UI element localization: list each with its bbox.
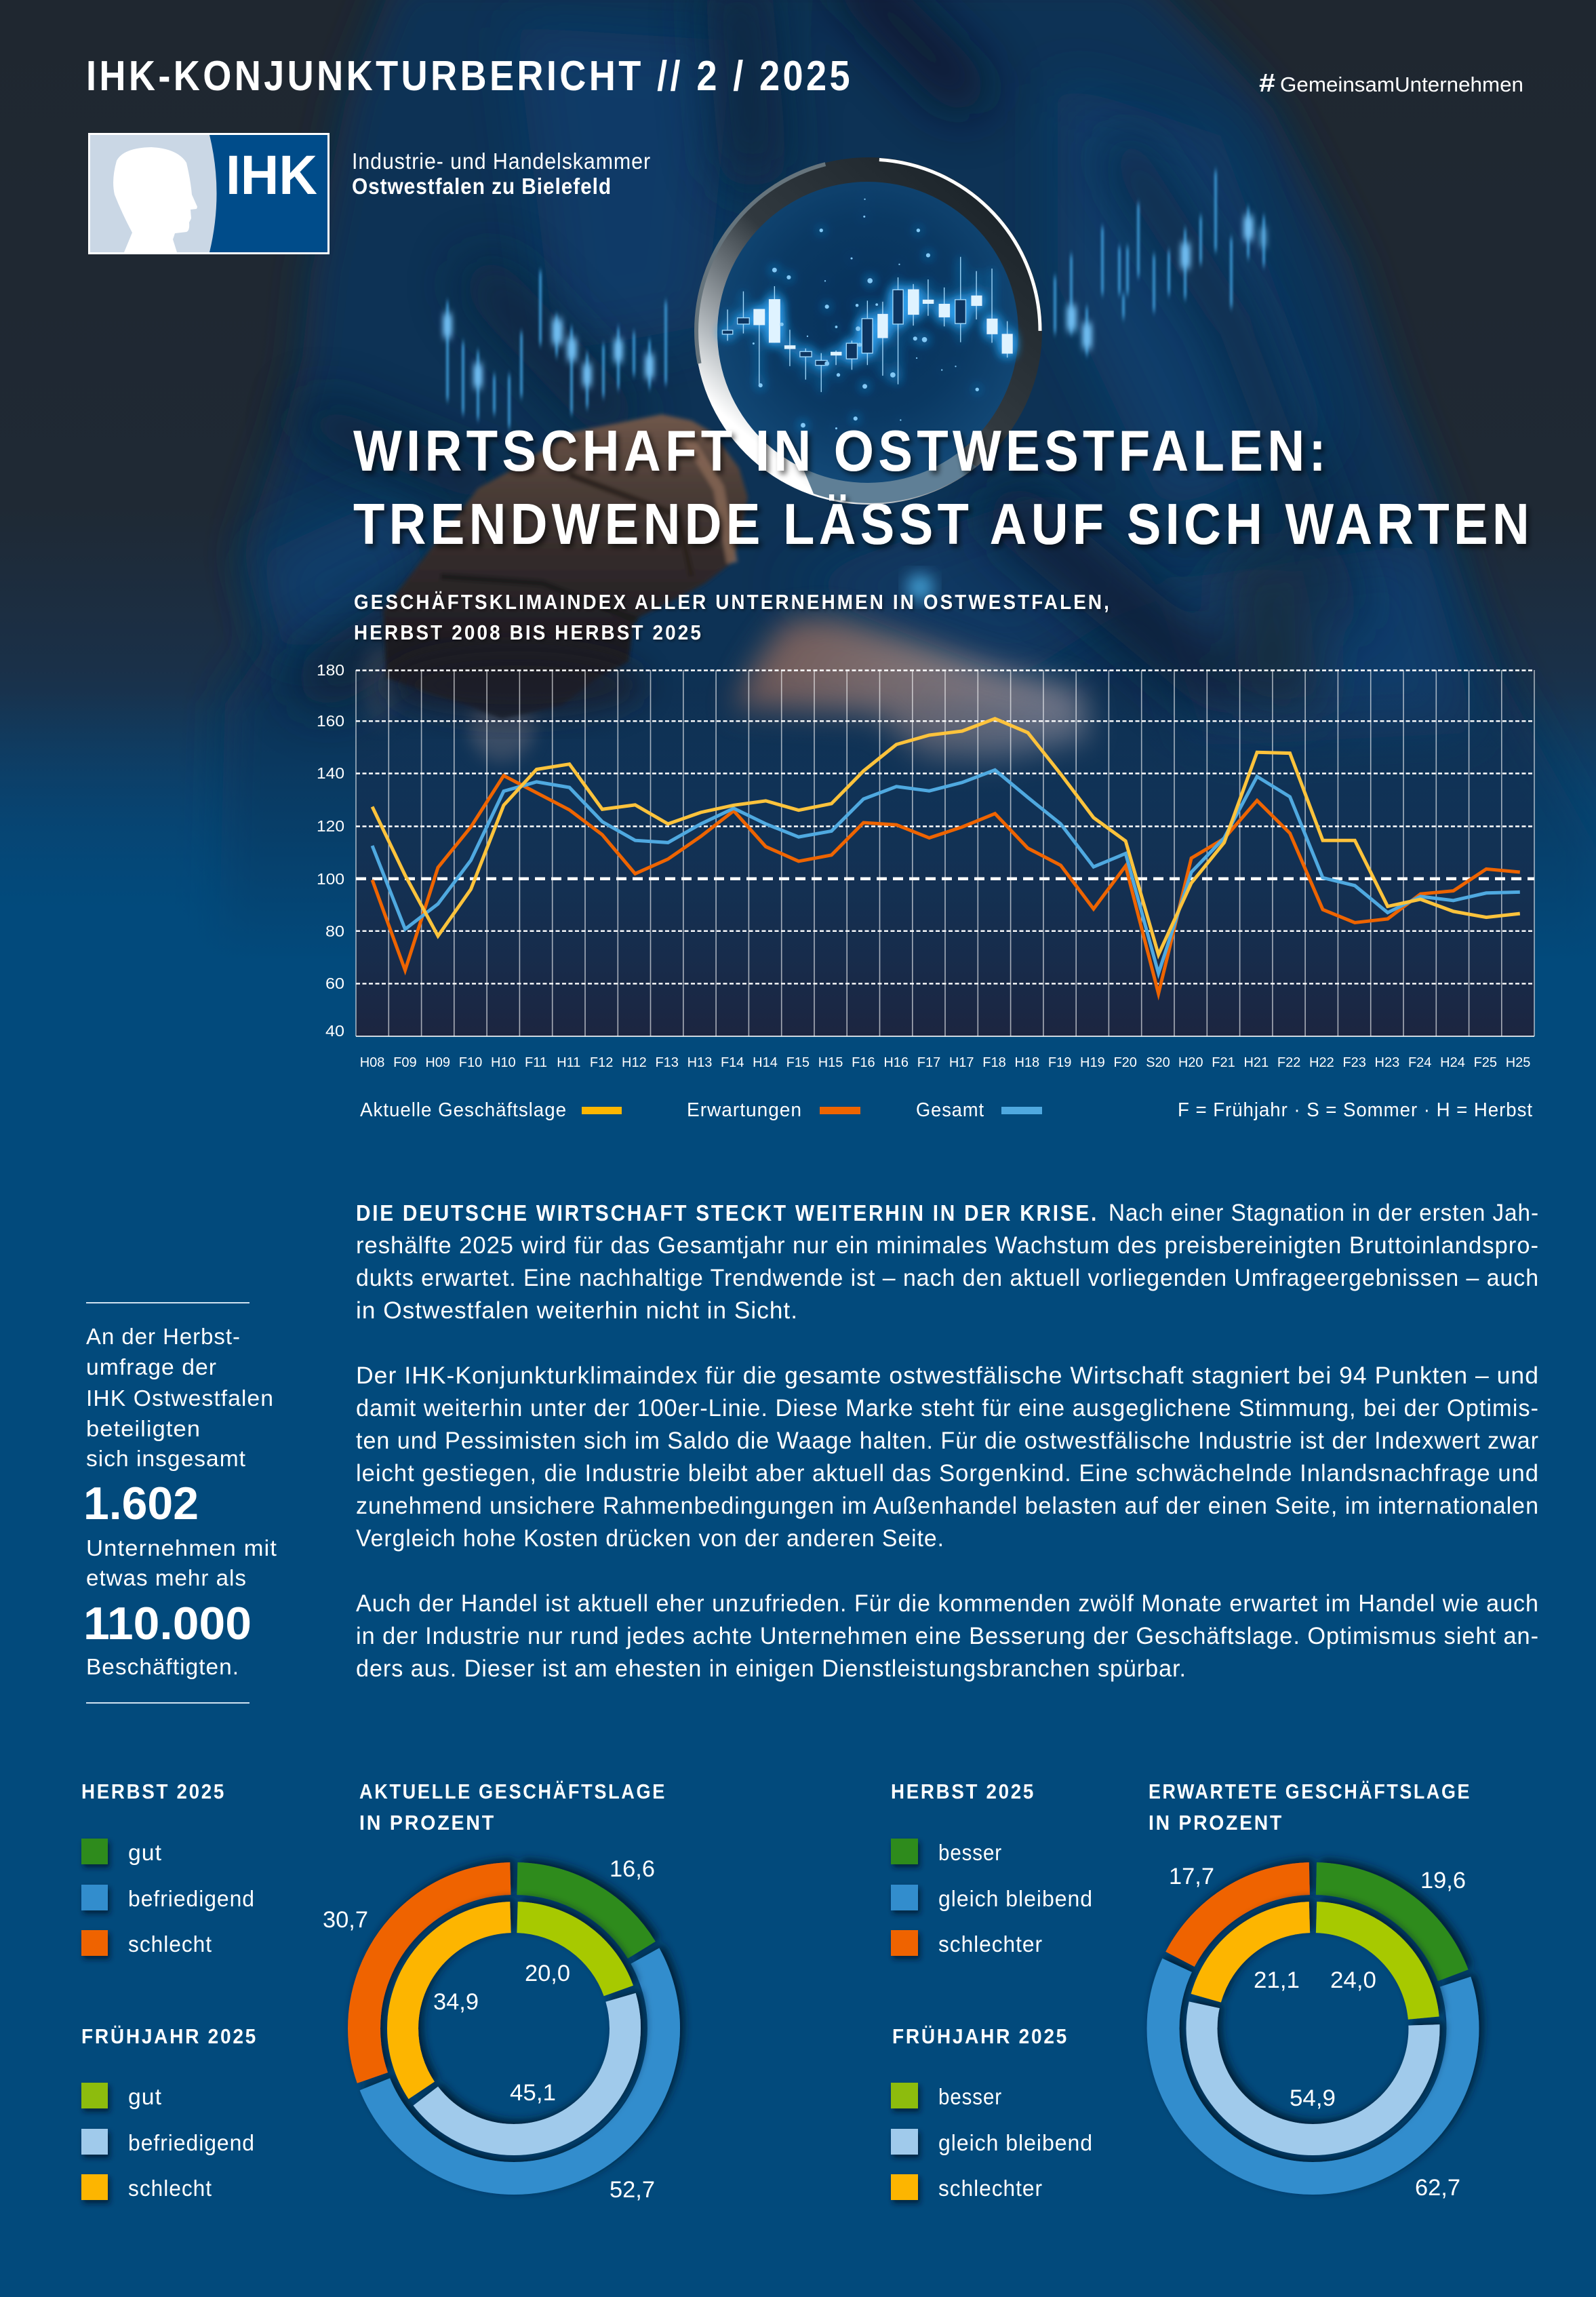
legend: aktuelle Geschäftslage: befriedigend	[128, 2130, 255, 2155]
x axis labels: F19	[1048, 1055, 1071, 1070]
x axis labels: S20	[1146, 1055, 1170, 1070]
x axis labels: F25	[1474, 1055, 1497, 1070]
legend: aktuelle Geschäftslage: FRÜHJAHR 2025	[81, 2024, 258, 2048]
hashtag: GemeinsamUnternehmen	[1280, 73, 1523, 96]
x axis labels: H24	[1440, 1055, 1465, 1070]
legend: aktuelle Geschäftslage: schlecht	[128, 2176, 212, 2201]
legend: erwartete Geschäftslage: schlechter	[938, 2176, 1043, 2201]
x axis labels: F12	[590, 1055, 613, 1070]
y axis labels: 100	[317, 870, 344, 888]
x axis labels: F20	[1113, 1055, 1137, 1070]
logo: IHK	[88, 133, 330, 254]
text block: paragraph 1: dukts erwartet. Eine nachhaltige Trendwende ist – nach den aktuell vorliegenden Umfrageergebnissen – auch	[356, 1265, 1539, 1291]
x axis labels: F17	[917, 1055, 940, 1070]
chart legend: Erwartungen	[687, 1099, 802, 1121]
y axis labels: 80	[325, 922, 344, 940]
chart panel	[356, 670, 1534, 1036]
hashtag: #	[1259, 69, 1275, 98]
main headline: WIRTSCHAFT IN OSTWESTFALEN:	[353, 419, 1330, 484]
x axis labels: H11	[557, 1055, 580, 1070]
icon: candlesticks in lens	[722, 199, 1013, 429]
callout: survey participation: Unternehmen mit	[86, 1535, 277, 1560]
text block: paragraph 3: ders aus. Dieser ist am ehesten in einigen Dienstleistungsbranchen spürbar.	[356, 1655, 1186, 1682]
shirt	[217, 0, 1596, 1017]
finger shadow blobs	[469, 695, 534, 763]
heading: aktuelle Geschäftslage	[359, 1780, 666, 1834]
value labels: 17,7	[1169, 1864, 1214, 1889]
x axis labels: F14	[721, 1055, 744, 1070]
legend: erwartete Geschäftslage: FRÜHJAHR 2025	[892, 2024, 1069, 2048]
organisation name: Industrie- und Handelskammer	[352, 149, 651, 174]
text block: paragraph 2	[356, 1362, 1539, 1552]
x axis labels: F16	[852, 1055, 875, 1070]
value labels	[323, 1856, 655, 2203]
x axis labels: H18	[1014, 1055, 1039, 1070]
legend: erwartete Geschäftslage: besser	[938, 2084, 1002, 2109]
main headline	[353, 419, 1534, 557]
chart legend: Aktuelle Geschäftslage	[360, 1099, 567, 1121]
callout: survey participation: 110.000	[83, 1598, 252, 1649]
donut chart: aktuelle Geschäftslage	[323, 1856, 664, 2203]
legend: erwartete Geschäftslage	[891, 1780, 1093, 2201]
callout: survey participation: IHK Ostwestfalen	[86, 1386, 274, 1411]
value labels: 20,0	[525, 1961, 570, 1986]
heading: aktuelle Geschäftslage: IN PROZENT	[359, 1811, 496, 1834]
text block: paragraph 1: in Ostwestfalen weiterhin nicht in Sicht.	[356, 1297, 798, 1324]
y axis labels	[317, 661, 344, 1040]
lens glass	[717, 182, 1018, 483]
callout: survey participation: sich insgesamt	[86, 1446, 246, 1471]
legend: aktuelle Geschäftslage: gut	[128, 1840, 162, 1865]
value labels: 54,9	[1290, 2085, 1336, 2111]
outer ring: Herbst 2025	[364, 1879, 664, 2178]
value labels: 45,1	[510, 2080, 556, 2106]
callout: survey participation: Beschäftigten.	[86, 1654, 239, 1679]
x axis labels: H09	[425, 1055, 450, 1070]
icon: magnifying glass	[695, 157, 1042, 505]
chart legend: F = Frühjahr · S = Sommer · H = Herbst	[1178, 1099, 1533, 1121]
value labels: 52,7	[610, 2177, 655, 2203]
callout: survey participation: beteiligten	[86, 1416, 201, 1441]
legend: aktuelle Geschäftslage	[81, 1780, 258, 2201]
x axis labels: H19	[1080, 1055, 1105, 1070]
text block: paragraph 3: Auch der Handel ist aktuell eher unzufrieden. Für die kommenden zwölf Monate erwartet im Handel wie auch	[356, 1590, 1539, 1617]
chart heading: GESCHÄFTSKLIMAINDEX ALLER UNTERNEHMEN IN OSTWESTFALEN,	[354, 590, 1111, 614]
legend: erwartete Geschäftslage: schlechter	[938, 1931, 1043, 1957]
legend: aktuelle Geschäftslage: befriedigend	[128, 1886, 255, 1911]
heading: erwartete Geschäftslage: ERWARTETE GESCHÄFTSLAGE	[1149, 1780, 1471, 1803]
series: Erwartungen	[372, 776, 1520, 994]
x axis labels: F13	[655, 1055, 679, 1070]
text block: paragraph 1: Nach einer Stagnation in der ersten Jah-	[1109, 1200, 1539, 1226]
legend: erwartete Geschäftslage: HERBST 2025	[891, 1780, 1035, 1803]
legend: erwartete Geschäftslage: gleich bleibend	[938, 1886, 1093, 1911]
value labels	[1169, 1864, 1466, 2201]
x axis labels: H15	[818, 1055, 843, 1070]
x axis labels: H12	[622, 1055, 647, 1070]
x axis labels: F24	[1408, 1055, 1431, 1070]
value labels: 16,6	[610, 1856, 655, 1882]
value labels: 19,6	[1420, 1868, 1466, 1893]
x axis labels: H23	[1375, 1055, 1399, 1070]
value labels: 34,9	[433, 1989, 479, 2015]
outer ring: Herbst 2025	[1163, 1879, 1463, 2178]
x axis labels: H13	[687, 1055, 712, 1070]
x axis labels: F18	[982, 1055, 1006, 1070]
callout: survey participation: 1.602	[83, 1478, 199, 1529]
hand	[383, 414, 748, 719]
chart heading: HERBST 2008 BIS HERBST 2025	[354, 621, 703, 644]
icon: blurred candlestick chart behind the lens	[443, 171, 1267, 427]
callout: survey participation: An der Herbst-	[86, 1324, 241, 1349]
chart heading	[354, 590, 1111, 644]
legend: erwartete Geschäftslage: besser	[938, 1840, 1002, 1865]
y axis labels: 140	[317, 764, 344, 782]
legend: aktuelle Geschäftslage: schlecht	[128, 1931, 212, 1957]
blurred glow point	[906, 574, 934, 601]
heading: erwartete Geschäftslage: IN PROZENT	[1149, 1811, 1283, 1834]
x axis labels: H21	[1243, 1055, 1269, 1070]
x axis labels: H20	[1178, 1055, 1203, 1070]
x axis labels: H14	[753, 1055, 778, 1070]
y axis labels: 120	[317, 817, 344, 835]
callout: survey participation	[83, 1302, 277, 1704]
x axis labels: H10	[491, 1055, 516, 1070]
x axis labels: H22	[1309, 1055, 1334, 1070]
text block: paragraph 2: Vergleich hohe Kosten drücken von der anderen Seite.	[356, 1525, 944, 1552]
legend: erwartete Geschäftslage: gleich bleibend	[938, 2130, 1093, 2155]
shirt folds	[258, 27, 1478, 746]
x axis labels: F15	[786, 1055, 810, 1070]
text block: paragraph 1	[356, 1200, 1539, 1324]
chart legend	[360, 1099, 1533, 1121]
x axis labels: F11	[525, 1055, 547, 1070]
x axis labels: F22	[1277, 1055, 1300, 1070]
x axis labels: H17	[949, 1055, 974, 1070]
series: Gesamt	[372, 770, 1520, 973]
forearm	[732, 617, 1089, 762]
y axis labels: 180	[317, 661, 344, 679]
text block: paragraph 2: damit weiterhin unter der 100er-Linie. Diese Marke steht für eine ausgeglichene Stimmung, bei der Optimis-	[356, 1395, 1539, 1421]
x axis labels: H25	[1506, 1055, 1530, 1070]
value labels: 24,0	[1330, 1967, 1376, 1993]
heading: report title: IHK-KONJUNKTURBERICHT // 2 / 2025	[86, 53, 853, 100]
y axis labels: 160	[317, 712, 344, 730]
legend: aktuelle Geschäftslage: HERBST 2025	[81, 1780, 226, 1803]
inner ring: Frühjahr 2025	[403, 1917, 625, 2140]
line chart: Geschäftsklimaindex	[317, 661, 1534, 1070]
callout: survey participation: etwas mehr als	[86, 1565, 247, 1590]
x axis labels: H16	[883, 1055, 909, 1070]
text block: paragraph 1: reshälfte 2025 wird für das Gesamtjahr nur ein minimales Wachstum des preisbereinigten Bruttoinlandspro-	[356, 1232, 1539, 1259]
value labels: 21,1	[1254, 1967, 1300, 1993]
x axis labels: F21	[1212, 1055, 1235, 1070]
callout: survey participation: umfrage der	[86, 1354, 217, 1379]
value labels: 62,7	[1415, 2175, 1460, 2201]
value labels: 30,7	[323, 1907, 368, 1933]
organisation name	[352, 149, 651, 199]
x axis labels: F23	[1342, 1055, 1366, 1070]
organisation name: Ostwestfalen zu Bielefeld	[352, 174, 612, 199]
legend: aktuelle Geschäftslage: gut	[128, 2084, 162, 2109]
heading: aktuelle Geschäftslage: AKTUELLE GESCHÄFTSLAGE	[359, 1780, 666, 1803]
fade of photo into the blue page	[0, 692, 1596, 1126]
text block: paragraph 3: in der Industrie nur rund jedes achte Unternehmen eine Besserung der Geschäftslage. Optimismus sieht an-	[356, 1623, 1539, 1649]
text block: paragraph 2: ten und Pessimisten sich im Saldo die Waage halten. Für die ostwestfälische Industrie ist der Indexwert zwar	[356, 1428, 1539, 1454]
lens rim	[695, 157, 1042, 505]
hand fade over chart	[386, 651, 644, 719]
text block: paragraph 2: Der IHK-Konjunkturklimaindex für die gesamte ostwestfälische Wirtschaft stagniert bei 94 Punkten – und	[356, 1362, 1539, 1389]
donut chart: erwartete Geschäftslage	[1163, 1864, 1466, 2201]
text block: paragraph 2: zunehmend unsichere Rahmenbedingungen im Außenhandel belasten auf der einen Seite, im internationalen	[356, 1493, 1539, 1519]
text block: paragraph 2: leicht gestiegen, die Industrie bleibt aber aktuell das Sorgenkind. Eine schwächelnde Inlandsnachfrage und	[356, 1460, 1539, 1487]
logo: IHK: IHK	[226, 144, 317, 206]
chart legend: Gesamt	[916, 1099, 984, 1121]
text block: paragraph 1: DIE DEUTSCHE WIRTSCHAFT STECKT WEITERHIN IN DER KRISE.	[356, 1200, 1098, 1225]
series: Aktuelle Geschäftslage	[372, 719, 1520, 955]
inner ring: Frühjahr 2025	[1201, 1917, 1424, 2140]
y axis labels: 60	[325, 975, 344, 992]
heading: erwartete Geschäftslage	[1149, 1780, 1471, 1834]
x axis labels	[360, 1055, 1530, 1070]
x axis labels: F09	[393, 1055, 417, 1070]
y axis labels: 40	[325, 1022, 344, 1040]
text block: paragraph 3	[356, 1590, 1539, 1682]
x axis labels: F10	[459, 1055, 482, 1070]
x axis labels: H08	[360, 1055, 384, 1070]
